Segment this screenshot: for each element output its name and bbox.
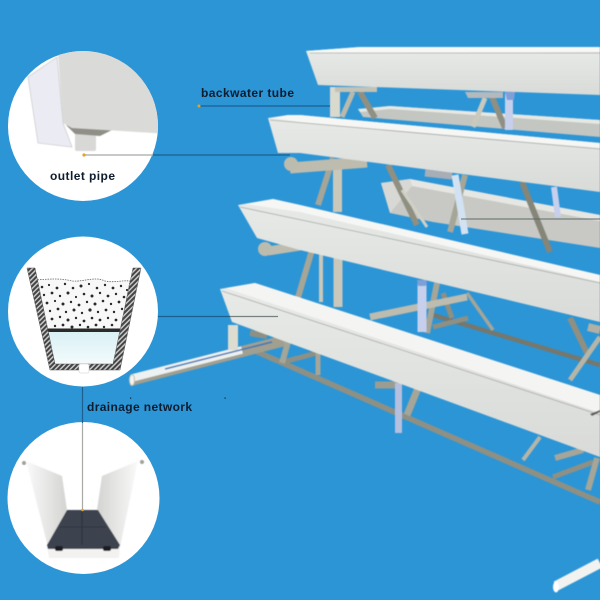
leader line: drainage network xyxy=(81,387,84,511)
base slab xyxy=(47,545,120,558)
separator mesh xyxy=(45,328,123,332)
outlet xyxy=(79,364,89,373)
spigot shadow xyxy=(66,125,112,136)
tray feet xyxy=(55,546,63,551)
leader line: backwater tube xyxy=(198,104,330,108)
back trough lower xyxy=(381,179,600,248)
pins xyxy=(22,461,26,465)
blue return tubes xyxy=(398,93,558,433)
second trough xyxy=(268,115,600,192)
steel rails and crossbars xyxy=(250,173,600,502)
diagonal and vertical legs xyxy=(282,87,600,490)
stray specks xyxy=(130,398,226,399)
growing bed rack illustration xyxy=(130,47,600,592)
drainage pipes xyxy=(130,157,600,592)
hatched container wall xyxy=(27,268,141,370)
label: drainage network: drainage network xyxy=(87,400,192,414)
top trough xyxy=(306,47,600,100)
label: backwater tube: backwater tube xyxy=(201,86,294,100)
back trough upper xyxy=(358,106,600,137)
circle: outlet pipe detail xyxy=(8,51,158,201)
trough end face xyxy=(28,57,72,147)
left wall xyxy=(26,461,67,547)
gravel media xyxy=(35,279,130,330)
right wall xyxy=(97,461,138,547)
outlet spigot xyxy=(74,134,96,152)
front trough xyxy=(220,283,600,457)
leader line: back trough xyxy=(461,218,600,220)
circle: drainage network detail xyxy=(8,422,160,574)
trough side face xyxy=(58,51,158,134)
third trough xyxy=(238,199,600,322)
black drainage tray xyxy=(47,510,120,549)
label: outlet pipe: outlet pipe xyxy=(50,169,115,183)
circle: media cross section xyxy=(8,236,158,386)
leader line: media section xyxy=(158,316,278,318)
leader line: outlet pipe xyxy=(82,153,290,157)
water layer xyxy=(47,331,120,365)
